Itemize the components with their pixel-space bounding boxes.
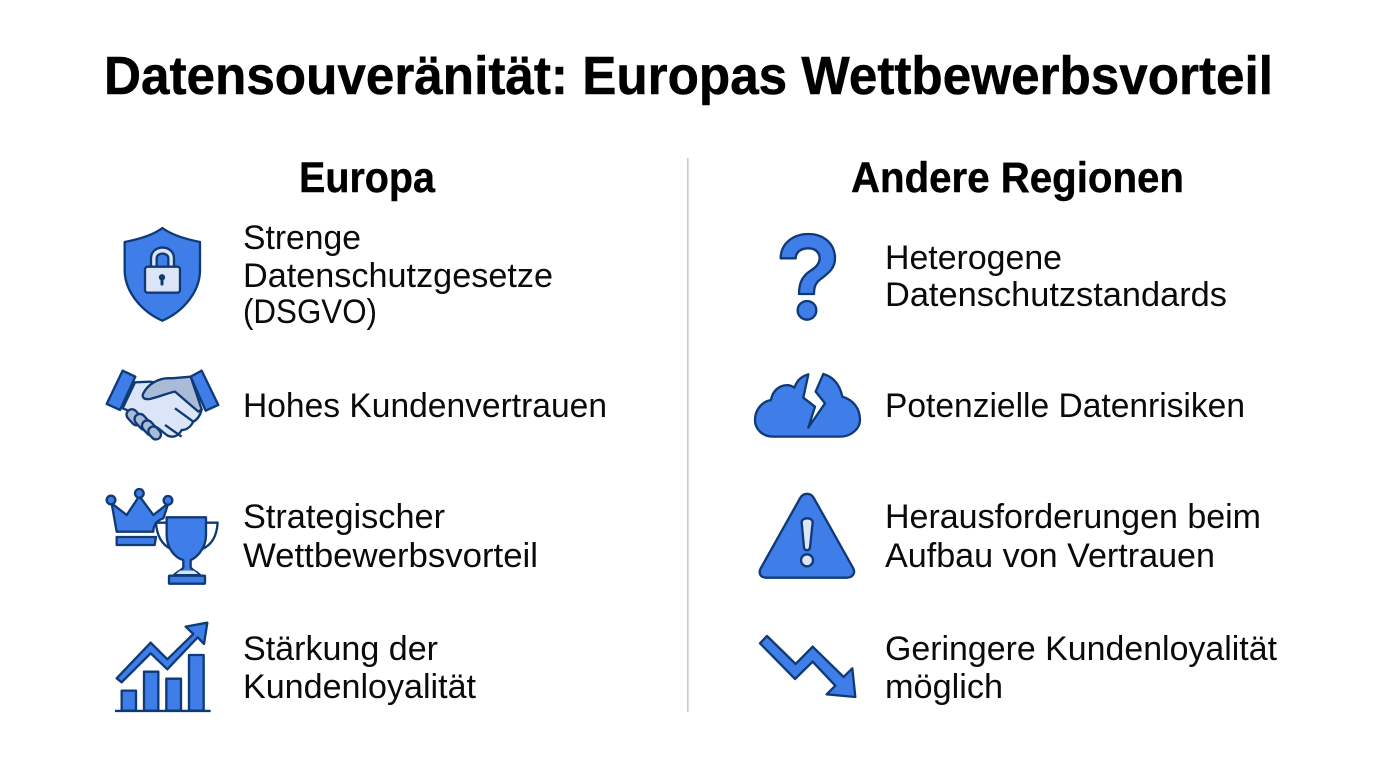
title: Datensouveränität: Europas Wettbewerbsvorteil xyxy=(104,47,1273,106)
heading: Andere Regionen: Andere Regionen xyxy=(851,155,1184,202)
text: strategischer Wettbewerbsvorteil: Strategischer xyxy=(243,498,445,536)
item: Herausforderungen beim Vertrauensaufbau: Aufbau von Vertrauen xyxy=(885,537,1215,575)
text: heterogene Datenschutzstandards: Heterogene xyxy=(885,239,1062,277)
item: hohes Kundenvertrauen xyxy=(107,371,607,442)
icon: cracked cloud xyxy=(755,374,860,437)
item: strategischer Wettbewerbsvorteil: Wettbewerbsvorteil xyxy=(243,537,538,575)
icon: warning triangle xyxy=(760,494,854,578)
item: strategischer Wettbewerbsvorteil xyxy=(107,489,538,584)
icon: handshake xyxy=(107,371,218,442)
text: hohes Kundenvertrauen: Hohes Kundenvertrauen xyxy=(243,387,607,425)
panel: Andere Regionen xyxy=(755,155,1277,706)
icon: crown and trophy xyxy=(107,489,218,584)
item: geringere Kundenloyalität: möglich xyxy=(885,668,1003,706)
icon: falling arrow xyxy=(760,636,855,697)
text: geringere Kundenloyalität: Geringere Kundenloyalität xyxy=(885,630,1277,668)
panel: Europa xyxy=(107,155,607,711)
icon: question mark xyxy=(781,234,835,320)
text: Herausforderungen beim Vertrauensaufbau: Herausforderungen beim xyxy=(885,498,1261,536)
icon: shield with padlock xyxy=(125,228,200,321)
item: strenge Datenschutzgesetze: (DSGVO) xyxy=(243,293,377,331)
item: heterogene Datenschutzstandards: Datenschutzstandards xyxy=(885,276,1227,314)
item: potenzielle Datenrisiken xyxy=(755,374,1245,437)
item: strenge Datenschutzgesetze xyxy=(125,219,553,331)
text: Stärkung der Kundenloyalität: Stärkung der xyxy=(243,630,438,668)
item: Stärkung der Kundenloyalität xyxy=(115,623,476,711)
item: geringere Kundenloyalität xyxy=(760,630,1277,706)
text: potenzielle Datenrisiken: Potenzielle Datenrisiken xyxy=(885,387,1245,425)
item: Herausforderungen beim Vertrauensaufbau xyxy=(760,494,1261,578)
heading: Europa: Europa xyxy=(299,155,435,202)
text: strenge Datenschutzgesetze: Strenge xyxy=(243,219,361,257)
divider between columns xyxy=(687,158,689,712)
item: strenge Datenschutzgesetze: Datenschutzgesetze xyxy=(243,257,553,295)
item: Stärkung der Kundenloyalität: Kundenloyalität xyxy=(243,668,476,706)
icon: rising bar chart with arrow xyxy=(115,623,211,711)
item: heterogene Datenschutzstandards xyxy=(781,234,1227,320)
